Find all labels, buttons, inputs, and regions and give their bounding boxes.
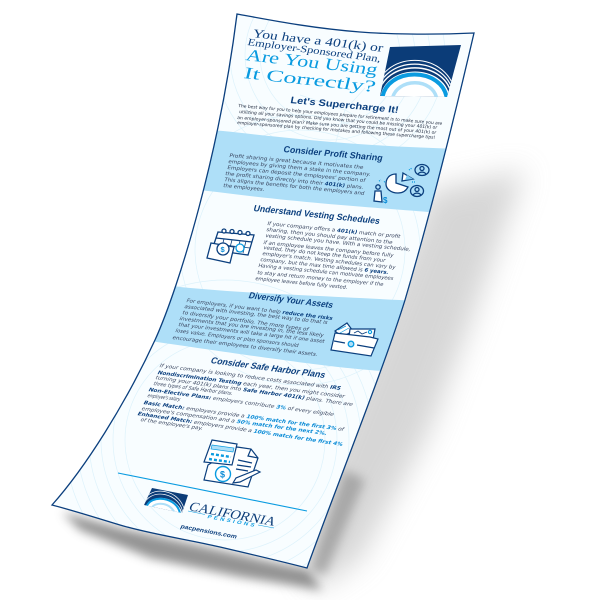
title: Are You Using: [244, 45, 380, 79]
icon: pie chart and people: [374, 164, 429, 205]
text block: vesting: Having a vesting schedule can motivate employees: [257, 263, 395, 282]
text block: profit sharing: Profit sharing is great because it motivates the: [228, 153, 364, 171]
logo: California Pensions: [141, 488, 279, 529]
text block: safe harbor: turning your 401(k) plans into Safe Harbor 401(k) plans. There are: [154, 375, 354, 408]
icon: wallet: [331, 323, 378, 356]
text block: profit sharing: Employers can deposit the employees' portion of: [226, 165, 366, 184]
text block: diversify: [171, 298, 334, 358]
text block: vesting: sharing, then you should pay attention to the: [265, 227, 393, 246]
divider rule: [118, 473, 307, 511]
text block: profit sharing: the employees.: [222, 183, 265, 193]
text block: intro: [237, 103, 443, 141]
paper shadow: [62, 170, 525, 590]
title: You have a 401(k) or: [251, 26, 385, 55]
title: [242, 26, 385, 96]
text block: diversify: investments that you are investing in, the less likely: [178, 316, 325, 339]
text block: safe harbor: employee's salary.: [146, 393, 182, 403]
text block: profit sharing: [222, 153, 371, 197]
icon: header logo arcs: [380, 45, 461, 97]
icon: pie chart and people: $: [383, 196, 388, 205]
text block: safe harbor: Nondiscrimination Testing each year, then you might consider: [156, 370, 347, 400]
title: It Correctly?: [242, 63, 378, 96]
heading: Understand Vesting Schedules: Understand Vesting Schedules: [252, 203, 381, 226]
text block: intro: The best way for you to help your employees prepare for retirement is to make sure you are: [237, 103, 443, 127]
text block: diversify: For employers, if you want to help reduce the risks: [185, 298, 334, 322]
text block: vesting: if an employee leaves the company before fully: [262, 240, 394, 259]
website url: pacpensions.com: [179, 523, 239, 541]
text block: diversify: that your investments will take a large hit if one asset: [177, 322, 326, 345]
text block: vesting: vesting schedule you have. With a vesting schedule,: [264, 233, 412, 253]
text block: vesting: [254, 221, 412, 291]
title: Employer-Sponsored Plan,: [246, 37, 382, 65]
panel: blue band diversify: [155, 286, 404, 371]
text block: safe harbor: Non-Elective Plans: employers contribute 3% of every eligible: [147, 387, 335, 418]
text block: intro: employer-sponsored plan by checking for mistakes and following these supercharge tips!: [237, 120, 436, 141]
text block: vesting: to stay and return money to the employer if the: [256, 270, 384, 288]
icon: calendar and money: $: [220, 245, 226, 254]
paper sheet: [52, 0, 474, 600]
text block: safe harbor: three types of Safe Harbor plans.: [152, 381, 234, 397]
text block: vesting: company, but the max time allowed is 6 years.: [259, 257, 389, 276]
heading: Diversify Your Assets: Diversify Your Assets: [247, 290, 335, 310]
panel: blue band profit sharing: [204, 130, 446, 212]
text block: diversify: loses value. Employers or plan sponsors should: [174, 328, 300, 349]
text block: safe harbor: If your company is looking to reduce costs associated with IRS: [158, 363, 342, 392]
text block: diversify: associated with investing, the best way to do that is: [183, 304, 329, 326]
text block: safe harbor: employee's compensation and a 50% match for the next 2%.: [140, 406, 328, 437]
text block: vesting: vested, they do not keep the funds from your: [262, 245, 387, 264]
text block: diversify: to diversify your portfolio. The more types of: [181, 310, 310, 333]
text block: intro: utilizing all your savings options. Did you know that you could be missing your 401(k) or: [239, 109, 438, 131]
text block: vesting: employee leaves before fully vested.: [254, 276, 349, 291]
text block: profit sharing: employees by giving them a stake in the company.: [227, 159, 371, 178]
heading: Let's Supercharge It: Let's Supercharge It!: [289, 95, 400, 116]
icon: calendar and money: [207, 229, 254, 263]
text block: safe harbor: Enhanced Match: employers provide a 100% match for the first 4%: [136, 411, 345, 448]
text block: safe harbor: Basic Match: employers provide a 100% match for the first 3% of: [142, 400, 345, 433]
icon: calculator and document: $: [220, 470, 225, 480]
text block: profit sharing: the profit sharing directly into their 401(k) plans.: [224, 171, 364, 191]
text block: safe harbor: of the employee's pay.: [139, 417, 204, 432]
text block: diversify: encourage their employees to diversify their assets.: [171, 335, 319, 358]
text block: intro: an employer-sponsored plan? Make sure you are getting the most out of your 401(k) or: [237, 115, 437, 136]
text block: vesting: If your company offers a 401(k) match or profit: [266, 221, 401, 240]
heading: Consider Profit Sharing: Consider Profit Sharing: [283, 144, 384, 163]
text block: safe harbor: [136, 363, 354, 448]
logo: California Pensions: CALIFORNIA: [187, 499, 279, 529]
text block: vesting: employer's match. Vesting schedules can vary by: [261, 251, 396, 271]
logo: California Pensions: PENSIONS: [206, 514, 258, 529]
heading: Consider Safe Harbor Plans: Consider Safe Harbor Plans: [209, 356, 327, 380]
icon: calculator and document: [204, 440, 260, 487]
text block: profit sharing: This aligns the benefits for both the employers and: [222, 177, 365, 197]
